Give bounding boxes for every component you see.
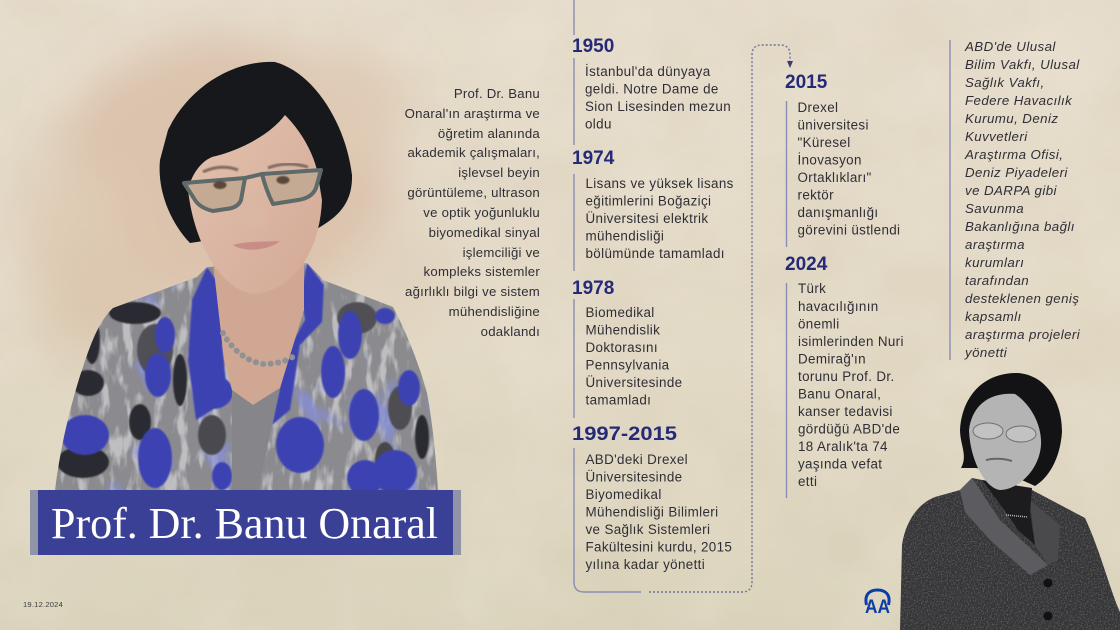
research projects text block: yönetti — [964, 345, 1008, 360]
face — [188, 115, 322, 294]
research projects text block: ve DARPA gibi — [965, 183, 1058, 198]
timeline entry: 2024: Demirağ'ın — [798, 352, 866, 366]
intro text: odaklandı — [481, 324, 540, 339]
timeline entry: 1978: 1978 — [572, 278, 614, 299]
research projects text block: Bakanlığına bağlı — [965, 219, 1075, 234]
face — [969, 394, 1041, 490]
research projects text block: kurumları — [965, 255, 1024, 270]
intro text — [405, 86, 540, 339]
timeline entry: 2015: 2015 — [785, 72, 828, 93]
hair — [960, 373, 1062, 486]
timeline entry: 2015: Ortaklıkları" — [798, 170, 872, 185]
research projects text block: araştırma — [965, 237, 1025, 252]
intro text: öğretim alanında — [438, 126, 540, 141]
timeline entry: 2015 — [785, 72, 900, 238]
black and white portrait photo — [895, 373, 1120, 630]
name title: Prof. Dr. Banu Onaral — [51, 499, 438, 548]
research projects text block: Deniz Piyadeleri — [965, 165, 1068, 180]
timeline entry: 2015: danışmanlığı — [798, 205, 878, 220]
intro text: işlevsel beyin — [458, 165, 540, 180]
timeline entry: 1997-2015 — [572, 424, 732, 572]
timeline entry: 2024: önemli — [798, 316, 840, 332]
research projects text block: kapsamlı — [965, 309, 1022, 324]
timeline entry: 2024: Türk — [798, 281, 826, 296]
research projects text block: Kurumu, Deniz — [965, 111, 1058, 126]
glasses — [973, 423, 1036, 442]
mouth — [986, 459, 1012, 461]
timeline entry: 1974 — [572, 148, 734, 261]
turtleneck — [982, 480, 1035, 545]
timeline arrow — [787, 61, 793, 68]
date: 19.12.2024 — [23, 600, 63, 609]
timeline entry: 1978: Pennsylvania — [586, 358, 670, 372]
research projects text block: araştırma projeleri — [965, 327, 1081, 342]
timeline entry: 2015: görevini üstlendi — [798, 222, 900, 238]
timeline entry: 1950: oldu — [585, 116, 612, 132]
hair — [160, 62, 352, 243]
timeline entry: 1950: Sion Lisesinden mezun — [585, 99, 731, 114]
timeline entry: 1974: mühendisliği — [586, 228, 664, 244]
eyebrows — [203, 164, 308, 172]
intro text: Onaral'ın araştırma ve — [405, 106, 540, 121]
timeline entry: 2024: 2024 — [785, 254, 828, 275]
timeline entry: 1974: eğitimlerini Boğaziçi — [586, 194, 711, 208]
timeline entry: 1950: geldi. Notre Dame de — [585, 82, 719, 96]
intro text: görüntüleme, ultrason — [407, 185, 540, 200]
timeline entry: 1997-2015: Fakültesini kurdu, 2015 — [586, 540, 732, 554]
mouth — [233, 241, 280, 250]
timeline entry: 1974: Üniversitesi elektrik — [586, 211, 708, 226]
jacket buttons — [1044, 578, 1052, 620]
research projects text block: Federe Havacılık — [965, 93, 1073, 108]
research projects text block: Savunma — [965, 201, 1024, 216]
watercolour wash behind portrait — [22, 40, 455, 360]
timeline entry: 1997-2015: 1997-2015 — [572, 424, 677, 445]
timeline entry: 1978: Biomedikal — [586, 305, 655, 320]
timeline entry: 1997-2015: Biyomedikal — [586, 487, 662, 502]
timeline entry: 1997-2015: Üniversitesinde — [586, 470, 682, 484]
timeline entry: 1978: Mühendislik — [586, 322, 660, 338]
timeline entry: 1978: tamamladı — [586, 392, 651, 408]
timeline entry: 1950: İstanbul'da dünyaya — [585, 64, 711, 79]
necklace — [223, 333, 294, 364]
timeline entry: 1974: bölümünde tamamladı — [586, 246, 725, 261]
intro text: biyomedikal sinyal — [429, 225, 540, 240]
blue print patches — [61, 263, 420, 496]
icon: AA logo: AA — [865, 597, 890, 618]
intro text: ve optik yoğunluklu — [423, 205, 540, 220]
timeline entry: 2015: "Küresel — [798, 135, 851, 150]
research projects text block: Kuvvetleri — [965, 129, 1028, 144]
timeline entry: 2024: yaşında vefat — [798, 456, 882, 472]
timeline entry: 2024: isimlerinden Nuri — [798, 334, 904, 349]
intro text: Prof. Dr. Banu — [454, 86, 540, 101]
research projects text block: desteklenen geniş — [965, 291, 1079, 306]
timeline entry: 2024: 18 Aralık'ta 74 — [798, 439, 888, 454]
glasses — [184, 170, 321, 211]
nose shadow — [240, 204, 267, 227]
timeline entry: 1978 — [572, 278, 682, 408]
patterned jacket and scarf — [50, 260, 445, 496]
research projects text block — [950, 39, 1081, 360]
timeline entry: 1950: 1950 — [572, 36, 614, 57]
timeline entry: 1978: Doktorasını — [586, 340, 658, 355]
research projects text block: ABD'de Ulusal — [964, 39, 1056, 54]
eyes — [214, 176, 290, 189]
intro text: ağırlıklı bilgi ve sistem — [405, 284, 540, 299]
timeline entry: 1950 — [572, 36, 731, 132]
main portrait photo — [50, 62, 445, 496]
intro text: işlemciliği ve — [463, 245, 540, 260]
intro text: mühendisliğine — [449, 304, 540, 319]
timeline entry: 2024: etti — [798, 474, 817, 489]
timeline connector lines — [574, 0, 790, 592]
timeline entry: 1997-2015: yılına kadar yönetti — [586, 557, 705, 572]
timeline entry: 1997-2015: ve Sağlık Sistemleri — [586, 522, 710, 537]
timeline entry: 1974: Lisans ve yüksek lisans — [586, 176, 734, 191]
jacket — [895, 470, 1120, 630]
neck and chest — [213, 262, 304, 405]
intro text: kompleks sistemler — [424, 264, 540, 279]
timeline entry: 1974: 1974 — [572, 148, 615, 169]
timeline entry: 2024: Banu Onaral, — [798, 386, 881, 402]
timeline entry: 2015: İnovasyon — [798, 152, 862, 168]
name banner — [30, 490, 461, 555]
necklace — [1006, 515, 1028, 517]
timeline entry: 2024: gördüğü ABD'de — [798, 422, 900, 436]
timeline entry: 2015: üniversitesi — [798, 118, 869, 132]
research projects text block: tarafından — [965, 273, 1029, 288]
research projects text block: Araştırma Ofisi, — [964, 147, 1063, 162]
timeline entry: 1978: Üniversitesinde — [586, 375, 682, 390]
intro text: akademik çalışmaları, — [407, 145, 540, 160]
v-neck sweater — [213, 262, 304, 405]
timeline entry: 2015: rektör — [798, 188, 834, 202]
timeline entry: 2024: kanser tedavisi — [798, 404, 893, 419]
timeline entry: 2024 — [785, 254, 904, 489]
timeline entry: 2015: Drexel — [798, 100, 838, 115]
research projects text block: Bilim Vakfı, Ulusal — [965, 57, 1080, 72]
dark print patches — [57, 302, 429, 478]
timeline entry: 1997-2015: ABD'deki Drexel — [586, 452, 688, 467]
research projects text block: Sağlık Vakfı, — [965, 75, 1045, 90]
timeline entry: 2024: torunu Prof. Dr. — [798, 369, 895, 384]
timeline entry: 2024: havacılığının — [798, 299, 879, 314]
timeline entry: 1997-2015: Mühendisliği Bilimleri — [586, 504, 718, 520]
